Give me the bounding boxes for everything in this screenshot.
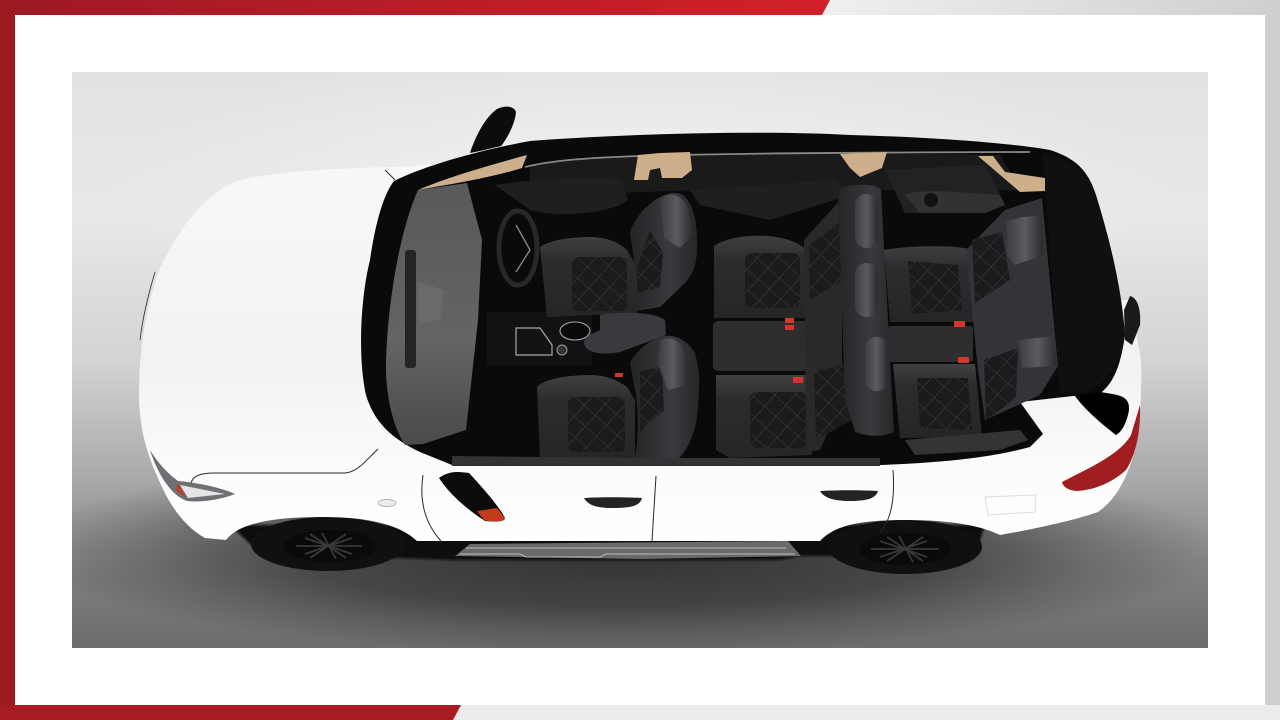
tan pillar: A bbox=[418, 155, 527, 190]
tan pillar: B bbox=[634, 152, 692, 180]
rear wheel bbox=[828, 520, 982, 574]
fender badge bbox=[378, 500, 396, 506]
tan pillar: D bbox=[978, 156, 1045, 192]
tan pillar: C bbox=[840, 152, 887, 177]
cushion bbox=[540, 237, 637, 317]
headrest bbox=[660, 195, 693, 248]
front seat top bbox=[540, 193, 697, 317]
steering wheel bbox=[499, 211, 537, 285]
backrest bbox=[630, 193, 697, 312]
quilted backrest bbox=[637, 230, 663, 293]
rear tail light bbox=[1062, 405, 1140, 491]
dash vent bbox=[405, 250, 416, 368]
rear tailgate glass bbox=[1043, 153, 1125, 394]
console bbox=[487, 312, 592, 365]
dash logo plate bbox=[418, 282, 444, 324]
front door black quarter panel bbox=[439, 472, 505, 522]
rear mirror bbox=[1124, 296, 1140, 345]
armrest bbox=[584, 313, 666, 354]
exterior mirror bbox=[470, 107, 516, 153]
front wheel bbox=[251, 517, 405, 571]
white body shell bbox=[139, 150, 1141, 541]
quilted cushion bbox=[572, 257, 627, 311]
rear black tailgate tip bbox=[1075, 392, 1129, 435]
running board bbox=[455, 541, 801, 559]
headlight bbox=[150, 450, 235, 501]
door trim top bbox=[495, 152, 1030, 220]
underbody bbox=[230, 525, 985, 560]
roof and glass outer black bbox=[361, 133, 1125, 465]
third row seats bbox=[884, 198, 1058, 455]
SUV cutaway bbox=[139, 107, 1141, 574]
photo background bbox=[72, 72, 1208, 648]
body seams and highlights bbox=[140, 170, 1036, 541]
red seatbelt buckles bbox=[615, 318, 969, 383]
lower sill bbox=[452, 456, 880, 466]
dashboard through windshield bbox=[386, 183, 482, 445]
middle row seats bbox=[713, 185, 894, 458]
front seat bottom bbox=[537, 336, 699, 465]
rear door handle bbox=[820, 490, 878, 501]
front door handle bbox=[584, 497, 642, 508]
